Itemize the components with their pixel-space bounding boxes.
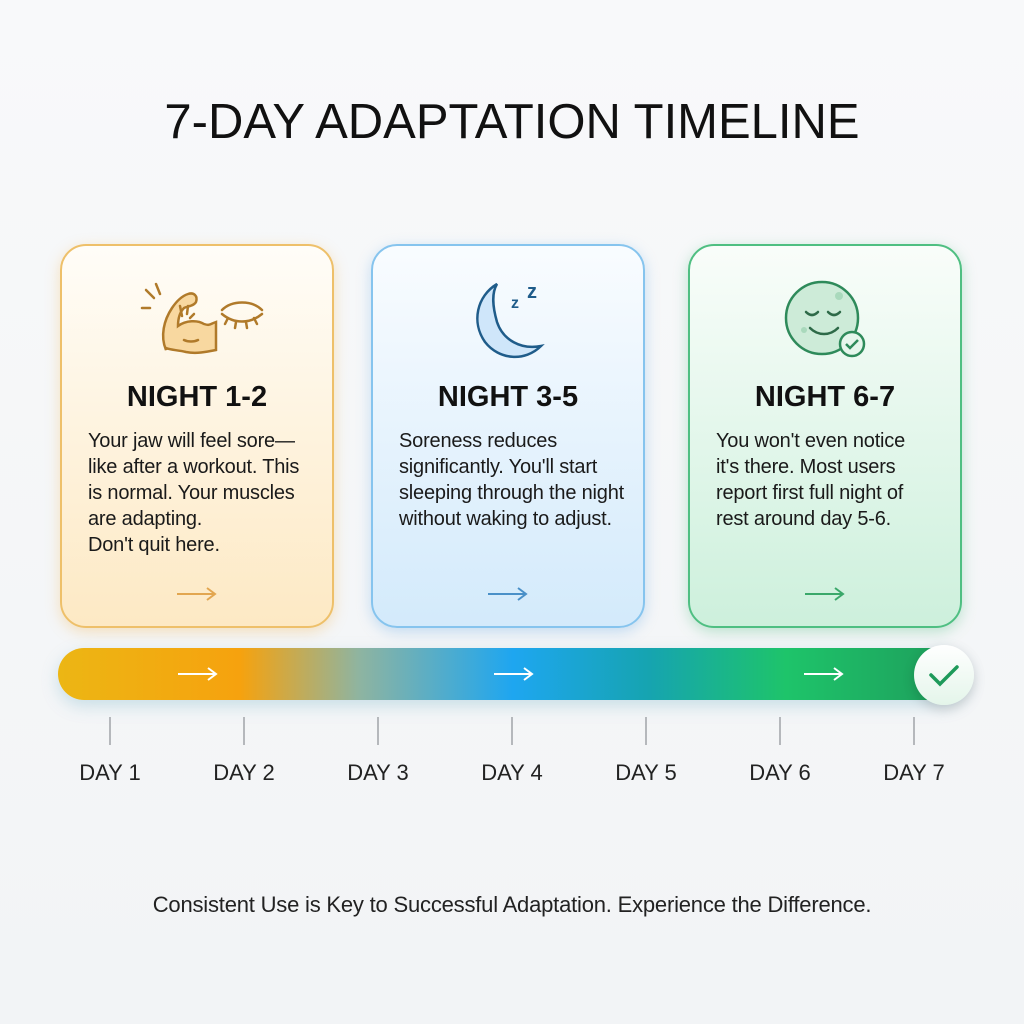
heading: NIGHT 3-5 — [438, 381, 578, 413]
day axis: DAY 7 — [883, 760, 945, 785]
text block: is normal. Your muscles — [88, 482, 295, 504]
panel: night 3-5 — [371, 244, 645, 628]
arrows on bar — [178, 667, 218, 681]
text block: You won't even notice — [716, 430, 905, 452]
text block: Your jaw will feel sore— — [88, 430, 295, 452]
icon: completion check — [914, 645, 974, 705]
timeline bar — [58, 648, 968, 700]
text block: significantly. You'll start — [399, 456, 597, 478]
arrow — [805, 587, 844, 601]
footer text: Consistent Use is Key to Successful Adaptation. Experience the Difference. — [153, 892, 871, 917]
text block: are adapting. — [88, 508, 202, 530]
text block: Soreness reduces — [399, 430, 557, 452]
text block: Don't quit here. — [88, 534, 220, 556]
day axis — [79, 717, 945, 785]
heading: NIGHT 6-7 — [755, 381, 895, 413]
text block: sleeping through the night — [399, 482, 624, 504]
text block — [716, 430, 905, 530]
day axis: DAY 3 — [347, 760, 409, 785]
text block: report first full night of — [716, 482, 903, 504]
day axis: DAY 5 — [615, 760, 677, 785]
arrow — [488, 587, 528, 601]
day axis: DAY 6 — [749, 760, 811, 785]
panel: night 6-7 — [688, 244, 962, 628]
icon: moon zz: z — [511, 295, 519, 312]
day axis: DAY 2 — [213, 760, 275, 785]
text block: rest around day 5-6. — [716, 508, 891, 530]
title: 7-DAY ADAPTATION TIMELINE — [164, 95, 860, 149]
text block — [88, 430, 299, 556]
icon: moon zz — [476, 281, 545, 358]
icon: muscle and closed eye — [140, 282, 264, 354]
day axis: DAY 4 — [481, 760, 543, 785]
heading: NIGHT 1-2 — [127, 381, 267, 413]
icon: moon zz: z — [527, 281, 537, 303]
text block: like after a workout. This — [88, 456, 299, 478]
text block: without waking to adjust. — [399, 508, 612, 530]
panel: night 1-2 — [60, 244, 334, 628]
icon: smiling moon with check — [784, 280, 866, 358]
text block: it's there. Most users — [716, 456, 895, 478]
text block — [399, 430, 624, 530]
arrow — [177, 587, 216, 601]
day axis: DAY 1 — [79, 760, 141, 785]
